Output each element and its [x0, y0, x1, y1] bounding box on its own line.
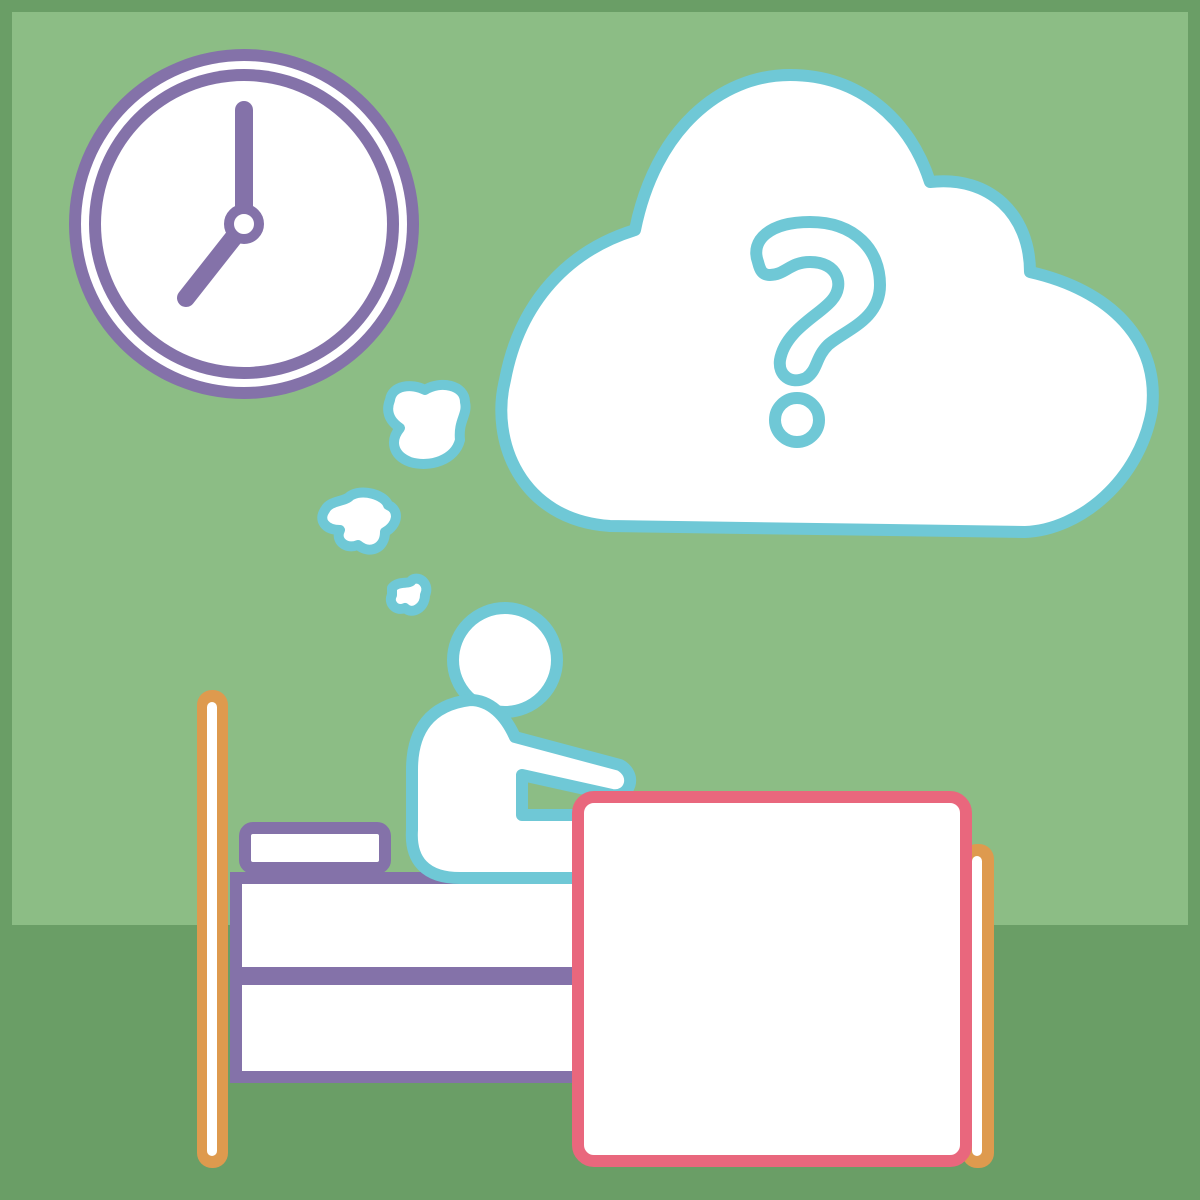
person sitting — [412, 608, 630, 878]
bed: headboard post — [197, 690, 228, 1168]
bed: foot post — [962, 844, 994, 1168]
blanket — [578, 797, 966, 1161]
question mark — [756, 222, 880, 442]
bed: mattress — [236, 878, 586, 1077]
small thought bubbles — [322, 385, 466, 611]
thought cloud with question mark — [501, 75, 1153, 532]
bed: pillow — [245, 828, 385, 868]
icon: clock — [69, 49, 419, 399]
